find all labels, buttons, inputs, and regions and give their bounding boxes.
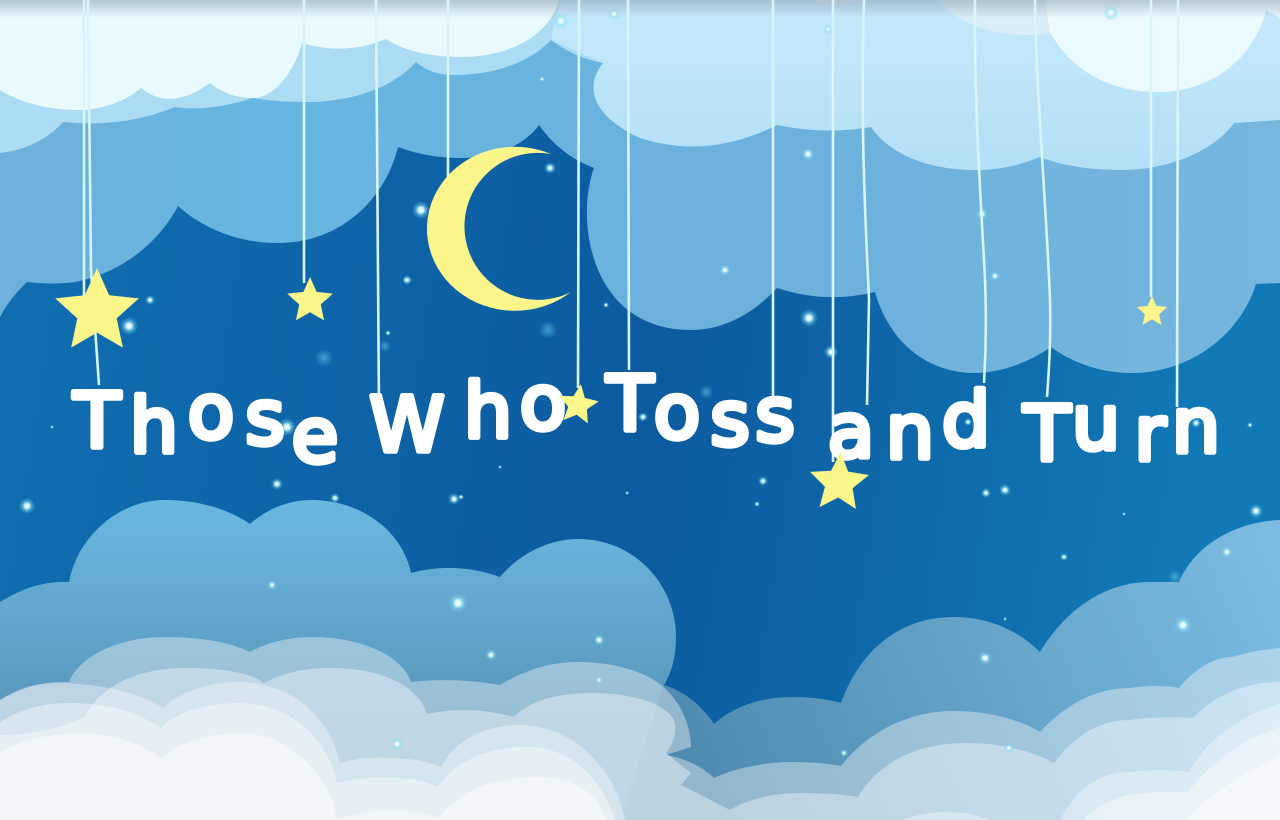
sparkles: on upper clouds [539,5,1119,281]
title: Those Who Toss and Turn [73,358,1220,480]
clouds: small bottom centre cloud [901,812,991,820]
clouds: upper left mid-blue layer [0,0,620,317]
clouds: right white layer one [1060,703,1280,820]
title word: Toss: Toss [606,359,795,463]
clouds: top right white cloud [1045,0,1280,92]
icon: star on word Who [556,381,601,425]
icon: star small right [1137,296,1167,325]
title word: Turn: Turn [1023,378,1220,478]
clouds: translucent layer two [0,668,1280,820]
sparkles: on lower clouds [267,546,1233,665]
clouds: upper left pale layer [0,0,640,153]
clouds: lower left blue layer [0,500,676,820]
clouds: translucent layer one [0,637,1280,820]
clouds: small top centre cloud [807,0,864,3]
clouds: left white layer three [0,733,606,820]
clouds: upper left white cloud [0,0,559,110]
clouds: left white layer one [0,682,625,820]
clouds: right white layer three [1187,757,1280,820]
icon: star under word and [808,450,870,510]
sparkles: front [390,676,1014,757]
clouds: lower right blue layer [600,520,1280,820]
title word: Who: Who [369,358,566,469]
icon: star small left [287,277,333,320]
title word: Those: Those [73,367,338,480]
title word: and: and [828,375,990,476]
clouds: upper right pale layer [551,0,1280,170]
clouds: top right translucent cloud [938,0,1120,35]
icon: crescent moon [427,147,571,311]
hanging strings [84,0,1178,462]
sparkles: stars behind clouds and in the sky [11,162,1263,621]
clouds: right white layer two [1083,727,1280,820]
clouds: upper right mid-blue layer [587,0,1280,373]
clouds: left white layer two [0,703,615,820]
clouds: top edge shade [0,0,1280,18]
icon: star large left [55,268,139,348]
